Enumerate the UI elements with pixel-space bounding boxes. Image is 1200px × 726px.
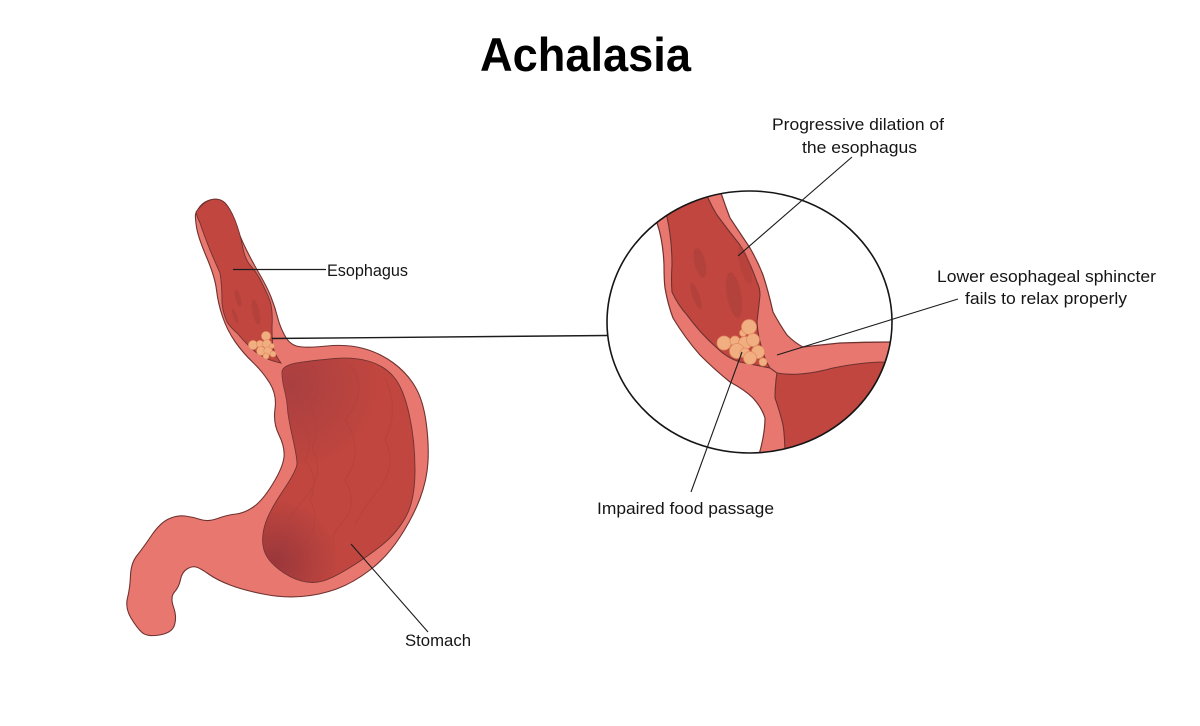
leader: food passage [691, 352, 742, 492]
stomach rugae folds [288, 365, 392, 572]
label: food passage: Impaired food passage [597, 499, 774, 518]
label: esophagus: Esophagus [327, 261, 408, 280]
leader: progressive dilation [738, 157, 852, 256]
magnified wall and lumen [656, 194, 890, 452]
stomach and esophagus outer wall [127, 199, 428, 636]
impacted food bolus [248, 331, 276, 359]
label: stomach: Stomach [405, 631, 471, 650]
label: sphincter: fails to relax properly [965, 289, 1128, 308]
magnified view [607, 185, 900, 470]
label: sphincter: Lower esophageal sphincter [937, 267, 1156, 286]
stomach shading [282, 358, 415, 470]
esophagus lumen [196, 199, 281, 363]
illustration: esophagus and stomach [127, 199, 428, 636]
leader: sphincter [777, 299, 958, 355]
leader: esophagus [233, 268, 326, 270]
magnified food bolus [717, 320, 767, 366]
magnifier circle [607, 191, 892, 453]
label: progressive dilation: Progressive dilation of [772, 115, 944, 134]
leader: stomach [351, 544, 428, 632]
stomach lower shading [263, 492, 350, 582]
label: progressive dilation: the esophagus [802, 138, 917, 157]
esophagus folds [230, 289, 262, 325]
title: Achalasia [480, 28, 692, 81]
stomach lumen [263, 358, 415, 582]
connector to magnified view [272, 336, 607, 338]
